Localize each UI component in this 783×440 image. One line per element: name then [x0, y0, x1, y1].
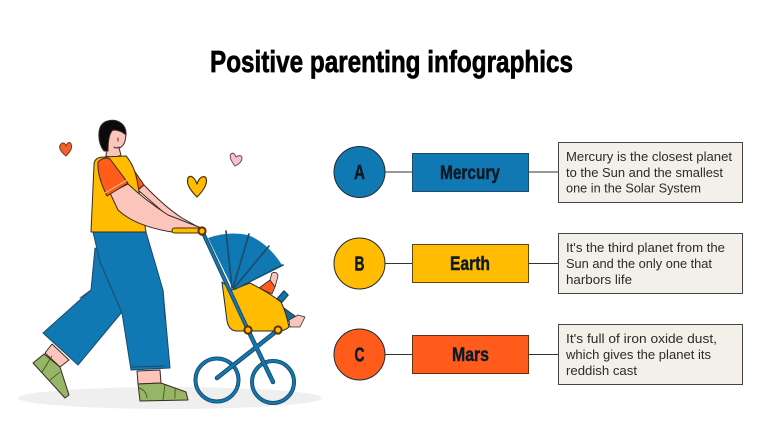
- description: Mercury is the closest planet: [566, 150, 733, 164]
- canopy ribs: [226, 231, 283, 289]
- label box: [412, 154, 528, 192]
- description box: [558, 234, 742, 294]
- front shoe: [138, 383, 188, 401]
- back shoe: [33, 354, 69, 398]
- canopy: [208, 234, 282, 289]
- facial features: [114, 138, 119, 148]
- baby leg and foot: [259, 280, 275, 294]
- label: Mercury: [440, 163, 500, 184]
- vest: [91, 156, 146, 232]
- letter B: B: [354, 254, 364, 276]
- label box: [412, 244, 528, 282]
- near sleeve: [98, 158, 128, 196]
- row C: [334, 324, 742, 384]
- sleeve cuff: [105, 180, 127, 193]
- hair: [99, 120, 126, 151]
- row A: [334, 142, 742, 202]
- description: [565, 332, 717, 378]
- trouser creases: [80, 290, 165, 367]
- stroller seat: [222, 282, 289, 331]
- description: harbors life: [566, 273, 632, 287]
- near arm: [110, 184, 204, 233]
- joints: [198, 227, 282, 334]
- row B: [334, 234, 742, 294]
- label: Earth: [450, 254, 490, 275]
- connectors: [385, 171, 558, 173]
- description: reddish cast: [566, 364, 638, 378]
- icon: pink heart: [230, 153, 242, 166]
- neck and face: [106, 129, 126, 157]
- push handle: [172, 228, 202, 233]
- baby armrest: [277, 291, 288, 302]
- illustration: parent pushing stroller: [18, 120, 322, 409]
- icon: red heart: [60, 143, 72, 156]
- connectors: [385, 354, 558, 356]
- description: [566, 150, 733, 196]
- far arm: [138, 185, 200, 232]
- circle B: [334, 238, 385, 289]
- near leg trousers: [93, 232, 170, 370]
- ankles: [45, 344, 161, 384]
- shoe stitching: [42, 356, 175, 400]
- circle C: [334, 329, 385, 380]
- frame upper: [204, 235, 248, 330]
- letter C: C: [354, 344, 364, 366]
- parent figure: [33, 120, 204, 401]
- frame lower: [217, 330, 278, 382]
- far leg trousers: [43, 248, 122, 365]
- stroller: [172, 227, 305, 403]
- description: It's full of iron oxide dust,: [566, 332, 717, 346]
- description: It's the third planet from the: [566, 241, 725, 255]
- connectors: [385, 262, 558, 264]
- description: one in the Solar System: [566, 182, 701, 196]
- ground shadow: [18, 387, 322, 409]
- baby lower leg: [283, 308, 295, 322]
- wheels: [196, 358, 294, 403]
- baby foot: [289, 315, 305, 327]
- letter A: A: [354, 162, 365, 184]
- description: which gives the planet its: [565, 348, 711, 362]
- label box: [412, 336, 528, 374]
- title: Positive parenting infographics: [210, 44, 573, 79]
- description box: [558, 324, 742, 384]
- description: to the Sun and the smallest: [566, 166, 724, 180]
- label: Mars: [452, 345, 489, 366]
- description: Sun and the only one that: [566, 257, 713, 271]
- description: [566, 241, 725, 287]
- circle A: [334, 146, 385, 198]
- description box: [558, 142, 742, 202]
- far sleeve: [125, 160, 144, 191]
- icon: yellow heart: [187, 176, 206, 197]
